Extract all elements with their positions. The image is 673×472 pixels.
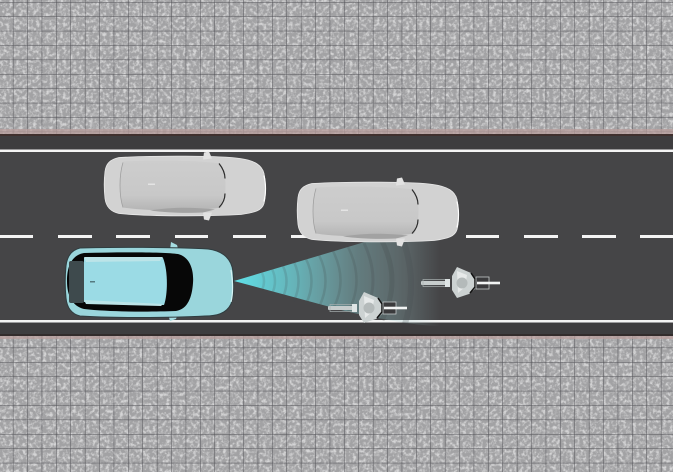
mirrors — [170, 242, 179, 252]
glass — [67, 252, 193, 312]
blue car with sensor — [65, 242, 234, 321]
sidewalk: top — [0, 0, 673, 136]
grey car: upper left — [104, 152, 266, 220]
road surface — [0, 136, 673, 336]
rear window — [69, 261, 84, 303]
centre dashed lane markings — [0, 235, 673, 238]
headlight edge — [231, 270, 232, 302]
grey car: centre — [297, 178, 458, 246]
cyclist: upper — [421, 267, 500, 298]
sidewalk: bottom — [0, 334, 673, 472]
body — [65, 247, 234, 318]
sensor beam — [234, 238, 440, 326]
cyclist: lower — [328, 292, 407, 323]
roof — [84, 258, 167, 305]
lane edge lines — [0, 150, 673, 322]
